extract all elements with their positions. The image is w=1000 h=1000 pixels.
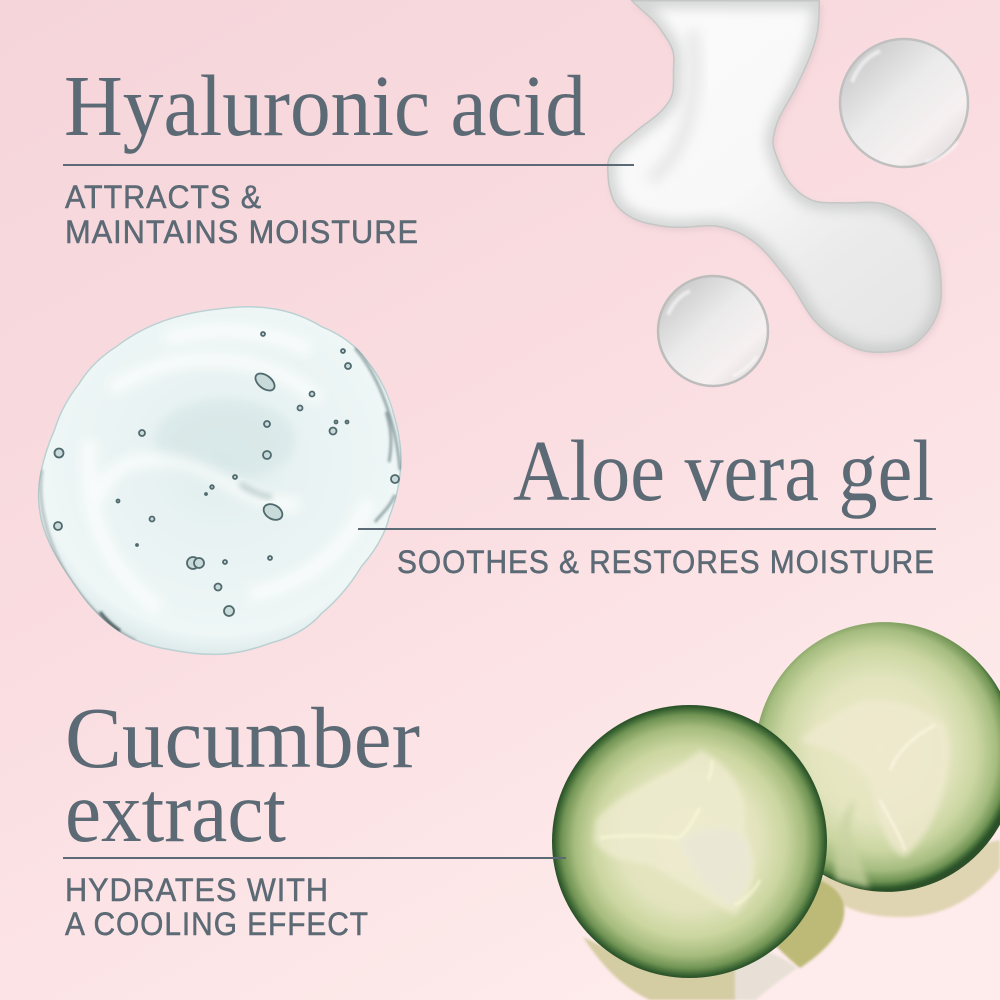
gel bubbles (54, 332, 399, 616)
icon: aloe vera gel swatch (38, 306, 402, 655)
text: attracts and maintains moisture: MAINTAINS MOISTURE (65, 214, 419, 250)
icon: hyaluronic acid serum blob (607, 0, 968, 386)
icon: large serum droplet (840, 39, 968, 167)
text: soothes and restores moisture: SOOTHES & RESTORES MOISTURE (397, 544, 935, 580)
icon: cucumber slice front (552, 705, 827, 978)
text: hydrates with a cooling effect: HYDRATES WITH (65, 872, 329, 908)
icon: small serum droplet (658, 276, 768, 386)
icon: cucumber slice back (737, 605, 1000, 909)
icon: cucumber shadows (583, 840, 1000, 1000)
heading: Aloe vera gel: Aloe vera gel (513, 422, 934, 519)
text: attracts and maintains moisture: ATTRACTS & (65, 179, 262, 215)
heading: Cucumber extract: Cucumber (65, 689, 420, 786)
heading: Cucumber extract: extract (65, 763, 286, 860)
text: hydrates with a cooling effect: A COOLING EFFECT (65, 906, 369, 942)
heading: Hyaluronic acid: Hyaluronic acid (64, 57, 586, 154)
